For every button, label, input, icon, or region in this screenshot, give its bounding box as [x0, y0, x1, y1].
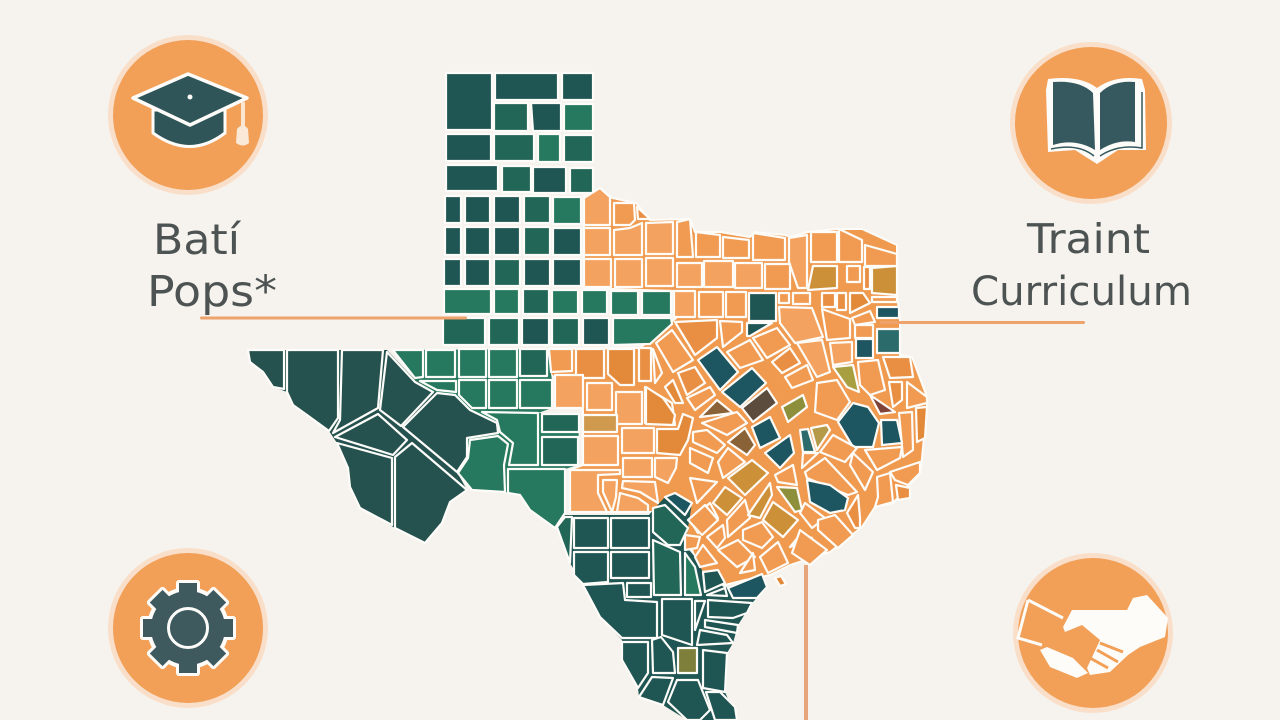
- connector line: right: [880, 321, 1085, 324]
- icon: open book: [1010, 42, 1172, 204]
- label: Batí Pops*: [147, 215, 277, 317]
- label: Batí Pops*: Batí: [153, 215, 241, 264]
- map region: east texas mixed counties: [698, 293, 920, 548]
- connector line: bottom: [804, 565, 808, 720]
- label: Traint Curriculum: Curriculum: [971, 269, 1192, 315]
- icon: graduation cap: [108, 35, 268, 195]
- map base: south texas region: [557, 493, 767, 720]
- map base: eastern orange region: [549, 188, 927, 585]
- connector line: left: [200, 316, 467, 320]
- icon: gear: [108, 548, 268, 708]
- icon: handshake: [1013, 553, 1173, 713]
- map region: trans-pecos counties: [248, 350, 498, 543]
- map region: panhandle counties: [443, 73, 672, 345]
- map region: central west green counties: [393, 349, 579, 528]
- map region: north and central orange counties: [549, 188, 927, 533]
- map base: central green region: [393, 349, 579, 528]
- map region: south texas counties: [557, 493, 767, 720]
- map base: trans-pecos region: [248, 350, 498, 543]
- label: Traint Curriculum: [971, 215, 1192, 315]
- label: Traint Curriculum: Traint: [1026, 215, 1150, 263]
- map region: south orange counties: [685, 505, 827, 586]
- label: Batí Pops*: Pops*: [147, 267, 277, 317]
- Texas county map: [248, 73, 927, 720]
